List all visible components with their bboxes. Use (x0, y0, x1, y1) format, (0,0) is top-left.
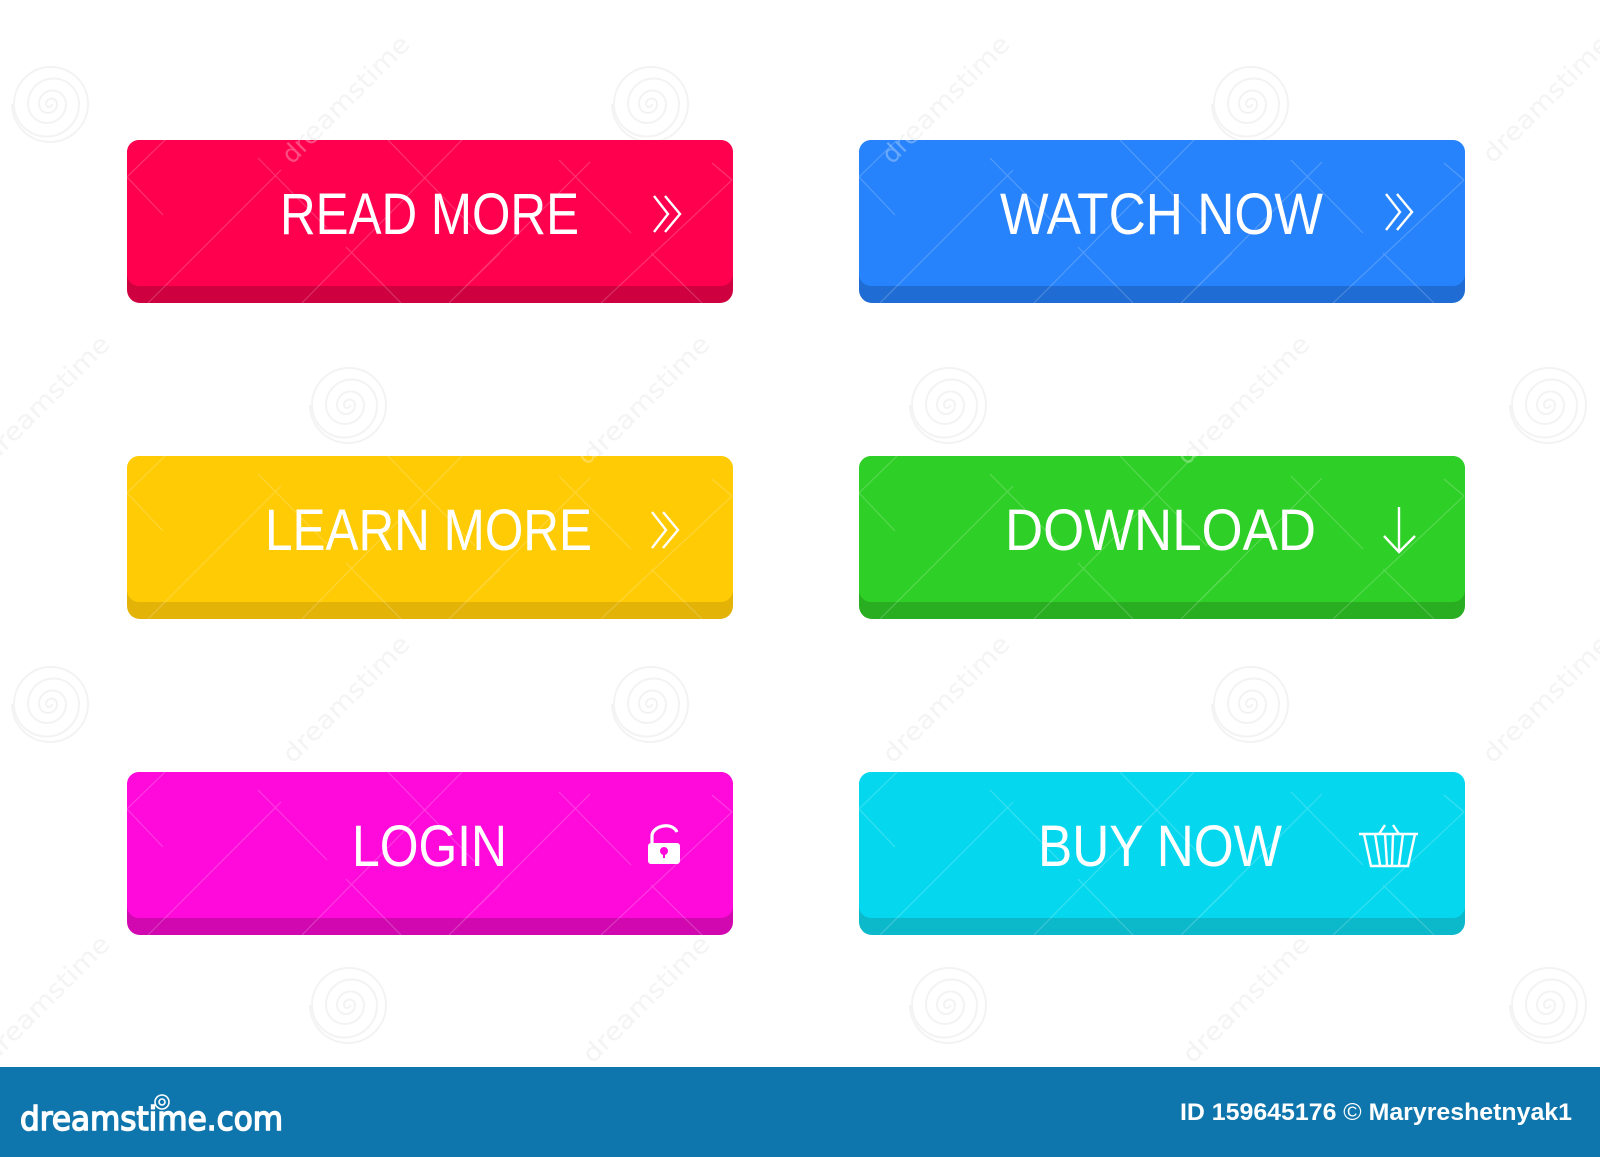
footer logo: dreamstime.com (20, 1099, 283, 1138)
button: learn more: d (571, 439, 602, 470)
button: learn more (127, 439, 733, 619)
icon: double chevron (1386, 194, 1412, 230)
label: read more: READ MORE (280, 182, 579, 247)
label: watch now: WATCH NOW (1000, 182, 1323, 247)
button: watch now: dre (876, 120, 925, 169)
button: download (859, 439, 1465, 619)
watermark layer: dreamstime (876, 29, 1016, 169)
button: buy now (859, 772, 1465, 935)
watermark layer: dreamstime (1476, 29, 1600, 169)
watermark layer: dreamstime (1476, 629, 1600, 769)
button: login (127, 772, 733, 935)
image credit: ID 159645176 © Maryreshetnyak1 (1180, 1099, 1572, 1126)
watermark layer: dreamstime (1176, 929, 1316, 1069)
button: read more (127, 120, 733, 303)
label: login: LOGIN (352, 814, 507, 879)
watermark layer: dreamstime (276, 29, 416, 169)
button: read more: dre (276, 120, 325, 169)
icon: open padlock (648, 826, 680, 864)
footer bar (0, 1067, 1600, 1157)
watermark layer: dreamstime (576, 929, 716, 1069)
label: learn more: LEARN MORE (265, 498, 592, 563)
watermark layer: dreamstime (1176, 329, 1316, 469)
button: watch now (859, 120, 1465, 303)
watermark layer: dreamstime (576, 329, 716, 469)
icon: double chevron (654, 196, 680, 232)
icon: shopping basket (1359, 825, 1418, 866)
icon: down arrow (1384, 507, 1415, 552)
watermark layer: dreamstime (876, 629, 1016, 769)
label: buy now: BUY NOW (1038, 814, 1282, 879)
watermark layer: dreamstime (276, 629, 416, 769)
button: download: d (1171, 439, 1202, 470)
label: download: DOWNLOAD (1005, 498, 1316, 563)
icon: double chevron (652, 512, 678, 548)
